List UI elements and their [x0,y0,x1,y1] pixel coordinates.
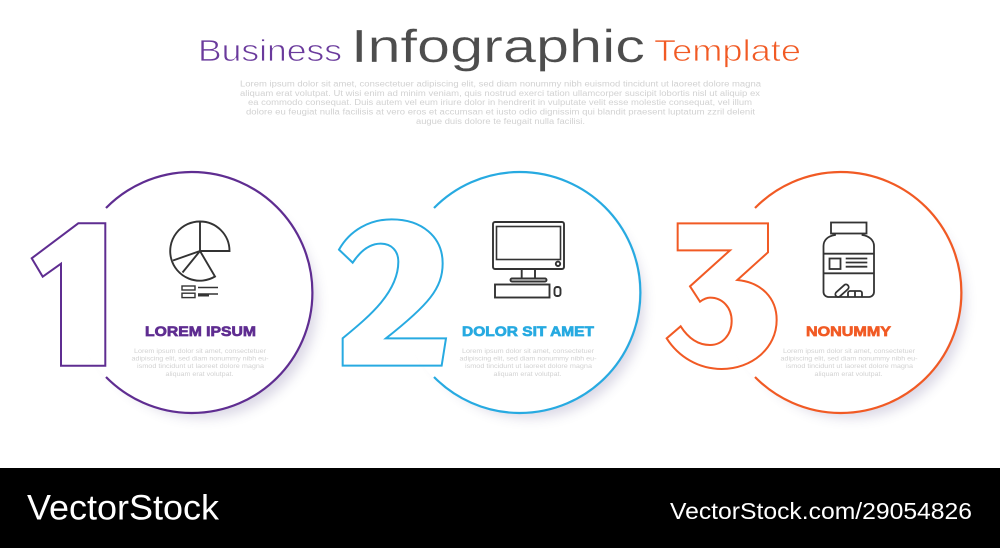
heading: lorem ipsum: LOREM IPSUM [145,323,256,339]
text block: step 2: Lorem ipsum dolor sit amet, consectetuer [462,349,594,355]
footer image id: VectorStock.com/29054826 [670,498,972,524]
text block: step 3: aliquam erat volutpat. [814,372,883,378]
panel: step 2 [339,172,644,418]
text block: step 2: adipiscing elit, sed diam nonummy nibh eu- [460,356,596,362]
footer logo text: VectorStock [27,488,220,528]
heading: nonummy: NONUMMY [806,323,892,339]
title: Template [654,33,801,68]
heading: dolor sit amet: DOLOR SIT AMET [462,323,594,339]
title [198,20,801,72]
icon: pill jar [824,222,874,298]
intro paragraph: augue duis dolore te feugait nulla facilisi. [416,117,585,126]
text block: step 3: ismod tincidunt ut laoreet dolore magna [786,364,914,370]
text block: step 2: ismod tincidunt ut laoreet dolore magna [465,364,593,370]
text block: step 3 [780,349,918,378]
panel: step 1 [32,172,317,418]
intro paragraph: aliquam erat volutpat. Ut wisi enim ad minim veniam, quis nostrud exerci tation ullamcorper suscipit lobortis nisl ut aliquip ex [240,89,760,98]
text block: step 2: aliquam erat volutpat. [494,372,562,378]
text block: step 1 [132,349,268,378]
intro paragraph: Lorem ipsum dolor sit amet, consectetuer adipiscing elit, sed diam nonummy nibh euismod tincidunt ut laoreet dolore magna [240,80,762,88]
intro paragraph: ea commodo consequat. Duis autem vel eum iriure dolor in hendrerit in vulputate velit esse molestie consequat, vel illum [248,98,752,107]
text block: step 3: Lorem ipsum dolor sit amet, consectetuer [783,349,915,355]
text block: step 1: aliquam erat volutpat. [166,372,234,378]
text block: step 1: ismod tincidunt ut laoreet dolore magna [137,364,265,370]
footer bar [0,468,1000,548]
text block: step 1: adipiscing elit, sed diam nonummy nibh eu- [132,356,268,362]
panel: step 3 [667,172,965,418]
icon: desktop computer [493,222,564,298]
title: Business [198,33,342,68]
number 1 [32,223,105,366]
icon: pie chart [170,221,230,298]
text block: step 1: Lorem ipsum dolor sit amet, consectetuer [134,349,266,355]
intro paragraph [240,80,762,126]
text block: step 3: adipiscing elit, sed diam nonummy nibh eu- [780,356,918,362]
intro paragraph: dolore eu feugiat nulla facilisis at vero eros et accumsan et iusto odio dignissim qui blandit praesent luptatum zzril delenit [246,108,756,116]
number 3 [667,223,777,369]
number 2 [339,219,446,366]
text block: step 2 [460,349,596,378]
title: Infographic [351,20,645,72]
